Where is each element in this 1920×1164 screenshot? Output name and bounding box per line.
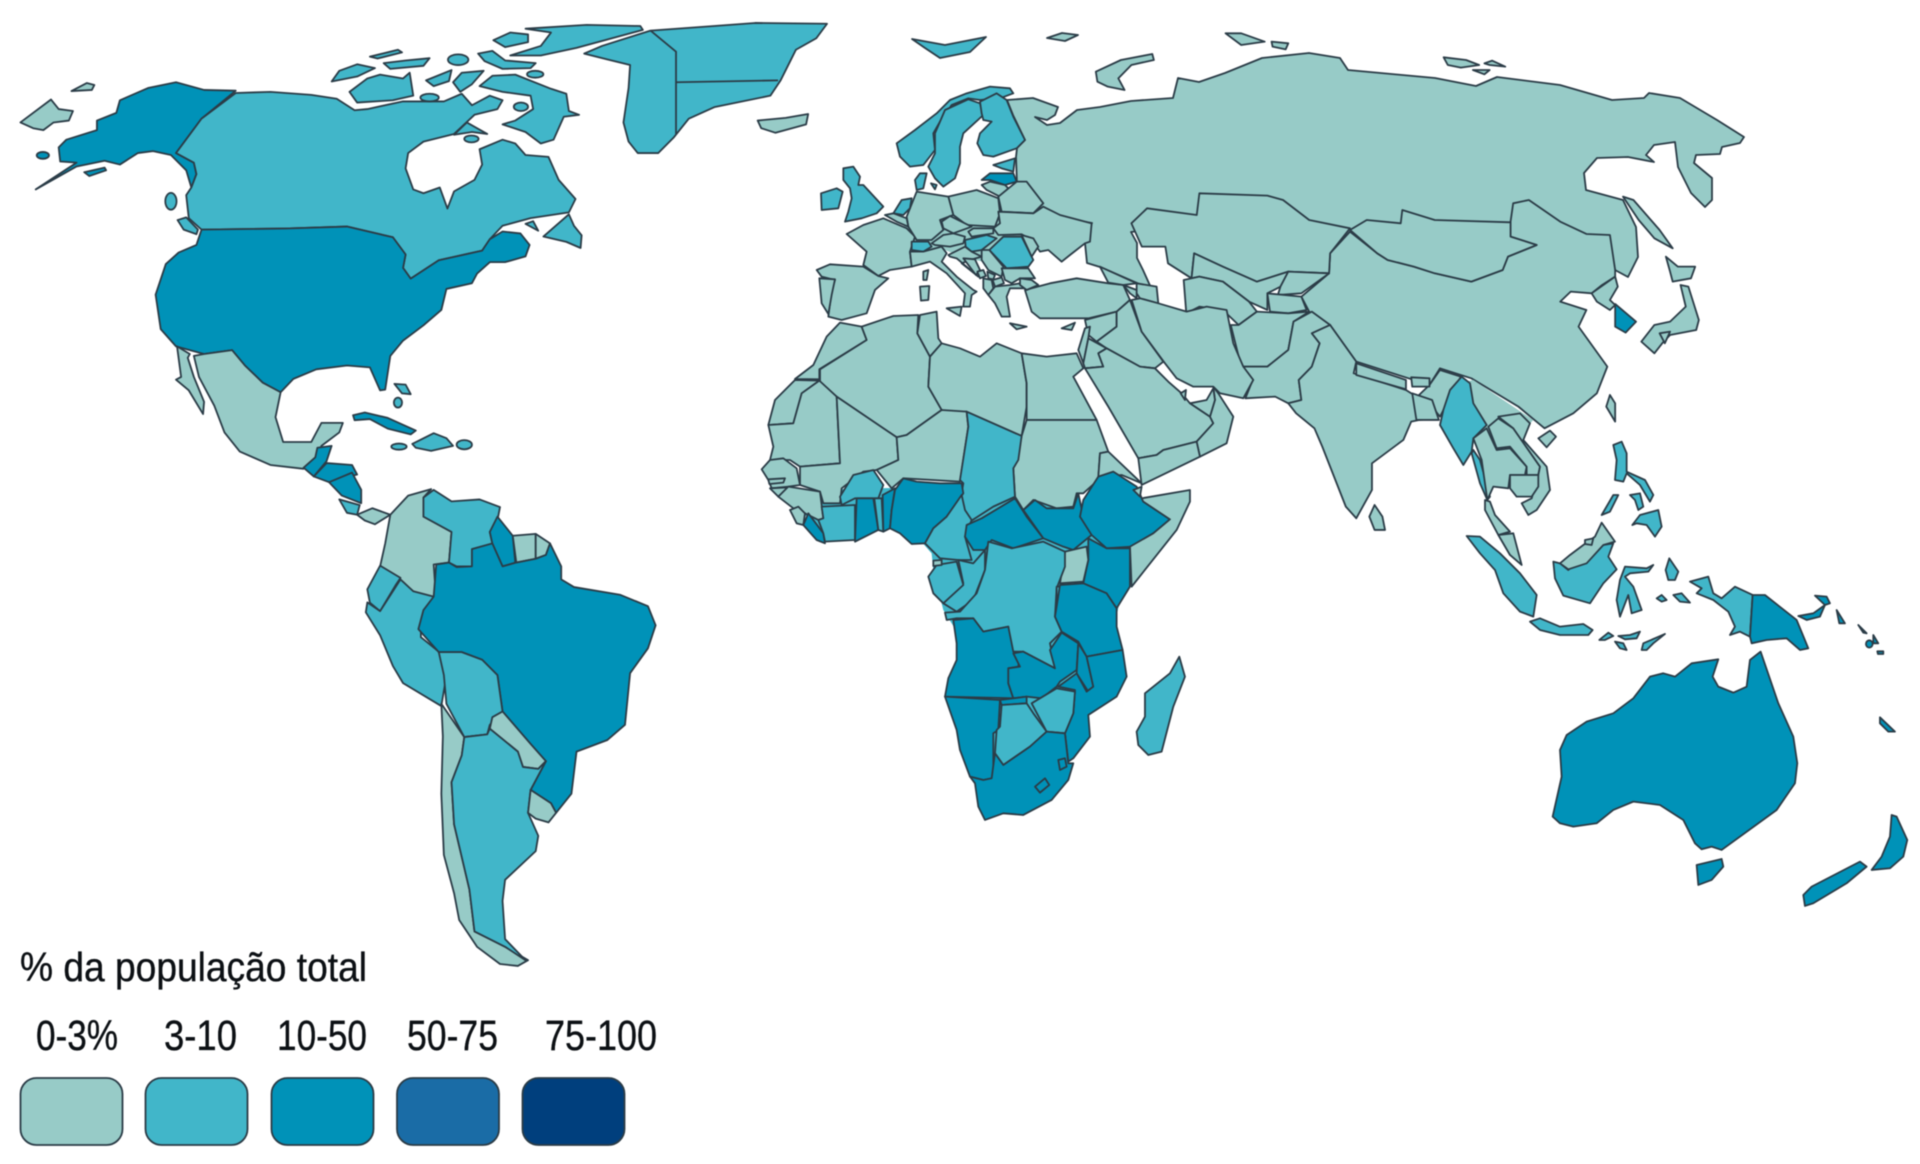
country: Sweden xyxy=(928,99,983,187)
legend item: 10-50: 10-50 xyxy=(277,1012,367,1060)
country: Norway xyxy=(897,87,1013,167)
country: Zimbabwe xyxy=(1032,688,1075,733)
country: Sudan xyxy=(1013,420,1108,510)
country: Mongolia xyxy=(1350,210,1537,282)
country: Algeria xyxy=(820,315,942,437)
legend item: 50-75 xyxy=(397,1012,499,1145)
country: Ukraine xyxy=(993,207,1092,262)
country: Chad xyxy=(960,412,1022,522)
country: China xyxy=(1301,200,1615,428)
country: Pakistan xyxy=(1241,312,1330,403)
country: Japan xyxy=(1641,257,1699,353)
country: South Africa xyxy=(970,732,1073,820)
island: Franz Josef Land xyxy=(1047,33,1078,41)
country: Poland xyxy=(948,190,1000,227)
country: India xyxy=(1288,325,1437,518)
island: Sri Lanka xyxy=(1369,505,1385,530)
map: Oceania and Indonesia xyxy=(1467,442,1907,906)
country: Bolivia xyxy=(439,652,503,737)
country: Germany xyxy=(907,192,953,240)
legend item: 75-100 xyxy=(522,1012,657,1145)
country: Greece xyxy=(988,283,1027,317)
country: Ghana xyxy=(855,498,878,542)
map: Sub-Saharan Africa xyxy=(762,458,1190,820)
country: Argentina xyxy=(452,729,546,960)
country: Mauritania xyxy=(768,381,840,467)
country: Colombia xyxy=(380,489,452,601)
island: Baffin xyxy=(480,75,579,144)
map: Central Europe and Balkans xyxy=(932,207,1092,317)
map: Southeast Asia mainland xyxy=(1440,377,1556,515)
country: United States xyxy=(156,227,530,392)
country: Egypt xyxy=(1022,353,1097,420)
region: Central America xyxy=(304,446,390,524)
country: Libya xyxy=(928,343,1027,436)
country: Uzbekistan xyxy=(1192,253,1288,310)
country: Namibia xyxy=(945,697,1000,780)
country: Congo xyxy=(943,550,985,612)
country: Latvia xyxy=(982,173,1017,185)
map: North and South America xyxy=(20,23,827,966)
legend item: 3-10: 3-10 xyxy=(164,1012,237,1060)
country: Finland xyxy=(977,93,1025,157)
country: Nigeria xyxy=(890,478,963,544)
legend item: 3-10 xyxy=(146,1012,248,1145)
country: Peru xyxy=(366,579,446,706)
country: Angola xyxy=(945,618,1020,698)
country: Saudi Arabia xyxy=(1085,348,1213,458)
legend item: 10-50 xyxy=(272,1012,374,1145)
legend item: 0-3% xyxy=(20,1012,122,1145)
country: France xyxy=(847,218,915,276)
island: Tasmania xyxy=(1697,859,1723,885)
country: Venezuela xyxy=(423,490,500,566)
country: Central African Republic xyxy=(965,498,1043,550)
legend xyxy=(20,944,657,1145)
country: South Sudan xyxy=(1023,493,1092,550)
state: Alaska xyxy=(36,82,236,189)
country: Paraguay xyxy=(490,711,546,769)
islands: Svalbard xyxy=(912,37,986,58)
legend item: 75-100: 75-100 xyxy=(545,1012,657,1060)
country: Ethiopia xyxy=(1080,472,1170,548)
country: Botswana xyxy=(995,703,1047,765)
country: Russia xyxy=(1007,53,1744,290)
country: United Kingdom xyxy=(843,167,883,222)
country: Turkey xyxy=(1025,278,1130,318)
country: Kazakhstan xyxy=(1131,193,1350,282)
country: DR Congo xyxy=(945,542,1065,668)
country: Madagascar xyxy=(1137,657,1185,755)
legend item: 50-75: 50-75 xyxy=(407,1012,498,1060)
country: Uruguay xyxy=(528,790,556,822)
country: Niger xyxy=(877,410,968,488)
country: Indonesia xyxy=(1467,536,1753,650)
country: Romania xyxy=(989,237,1033,268)
country: Spain xyxy=(817,264,888,320)
island: Novaya Zemlya xyxy=(1096,54,1154,90)
country: Tanzania xyxy=(1055,583,1123,657)
map: Russia and Arctic islands xyxy=(912,33,1744,290)
country: Papua New Guinea xyxy=(1750,595,1808,650)
country: Philippines xyxy=(1602,442,1662,537)
country: Mozambique xyxy=(1058,650,1127,762)
map: Asia xyxy=(1096,33,1699,530)
legend item: 0-3%: 0-3% xyxy=(36,1012,118,1060)
country: Chile xyxy=(441,704,528,966)
country: Mali xyxy=(800,397,898,503)
map: Europe, Middle East and North Africa xyxy=(768,218,1253,522)
island: Iceland xyxy=(758,114,808,133)
country: Australia xyxy=(1553,652,1797,850)
country: Mexico xyxy=(194,350,343,469)
country: Iran xyxy=(1132,298,1253,398)
country: Ireland xyxy=(821,188,843,210)
legend title: % da população total xyxy=(20,944,367,990)
country: Myanmar xyxy=(1440,377,1487,465)
country: Italy xyxy=(910,247,977,307)
country: Hungary xyxy=(965,235,997,252)
country: South Korea xyxy=(1615,304,1636,333)
country: Canada xyxy=(176,92,576,279)
country: Brazil xyxy=(418,543,656,813)
country: Iraq xyxy=(1097,300,1163,368)
country: Liberia xyxy=(803,513,825,543)
country: New Zealand xyxy=(1803,815,1907,906)
country: Greenland xyxy=(584,23,827,153)
region: Caribbean xyxy=(353,384,472,451)
country: Afghanistan xyxy=(1231,312,1309,367)
country: Somalia xyxy=(1130,490,1190,587)
country: Zambia xyxy=(1008,633,1078,698)
map: Northern Europe xyxy=(821,87,1043,240)
country: Kenya xyxy=(1083,538,1130,608)
